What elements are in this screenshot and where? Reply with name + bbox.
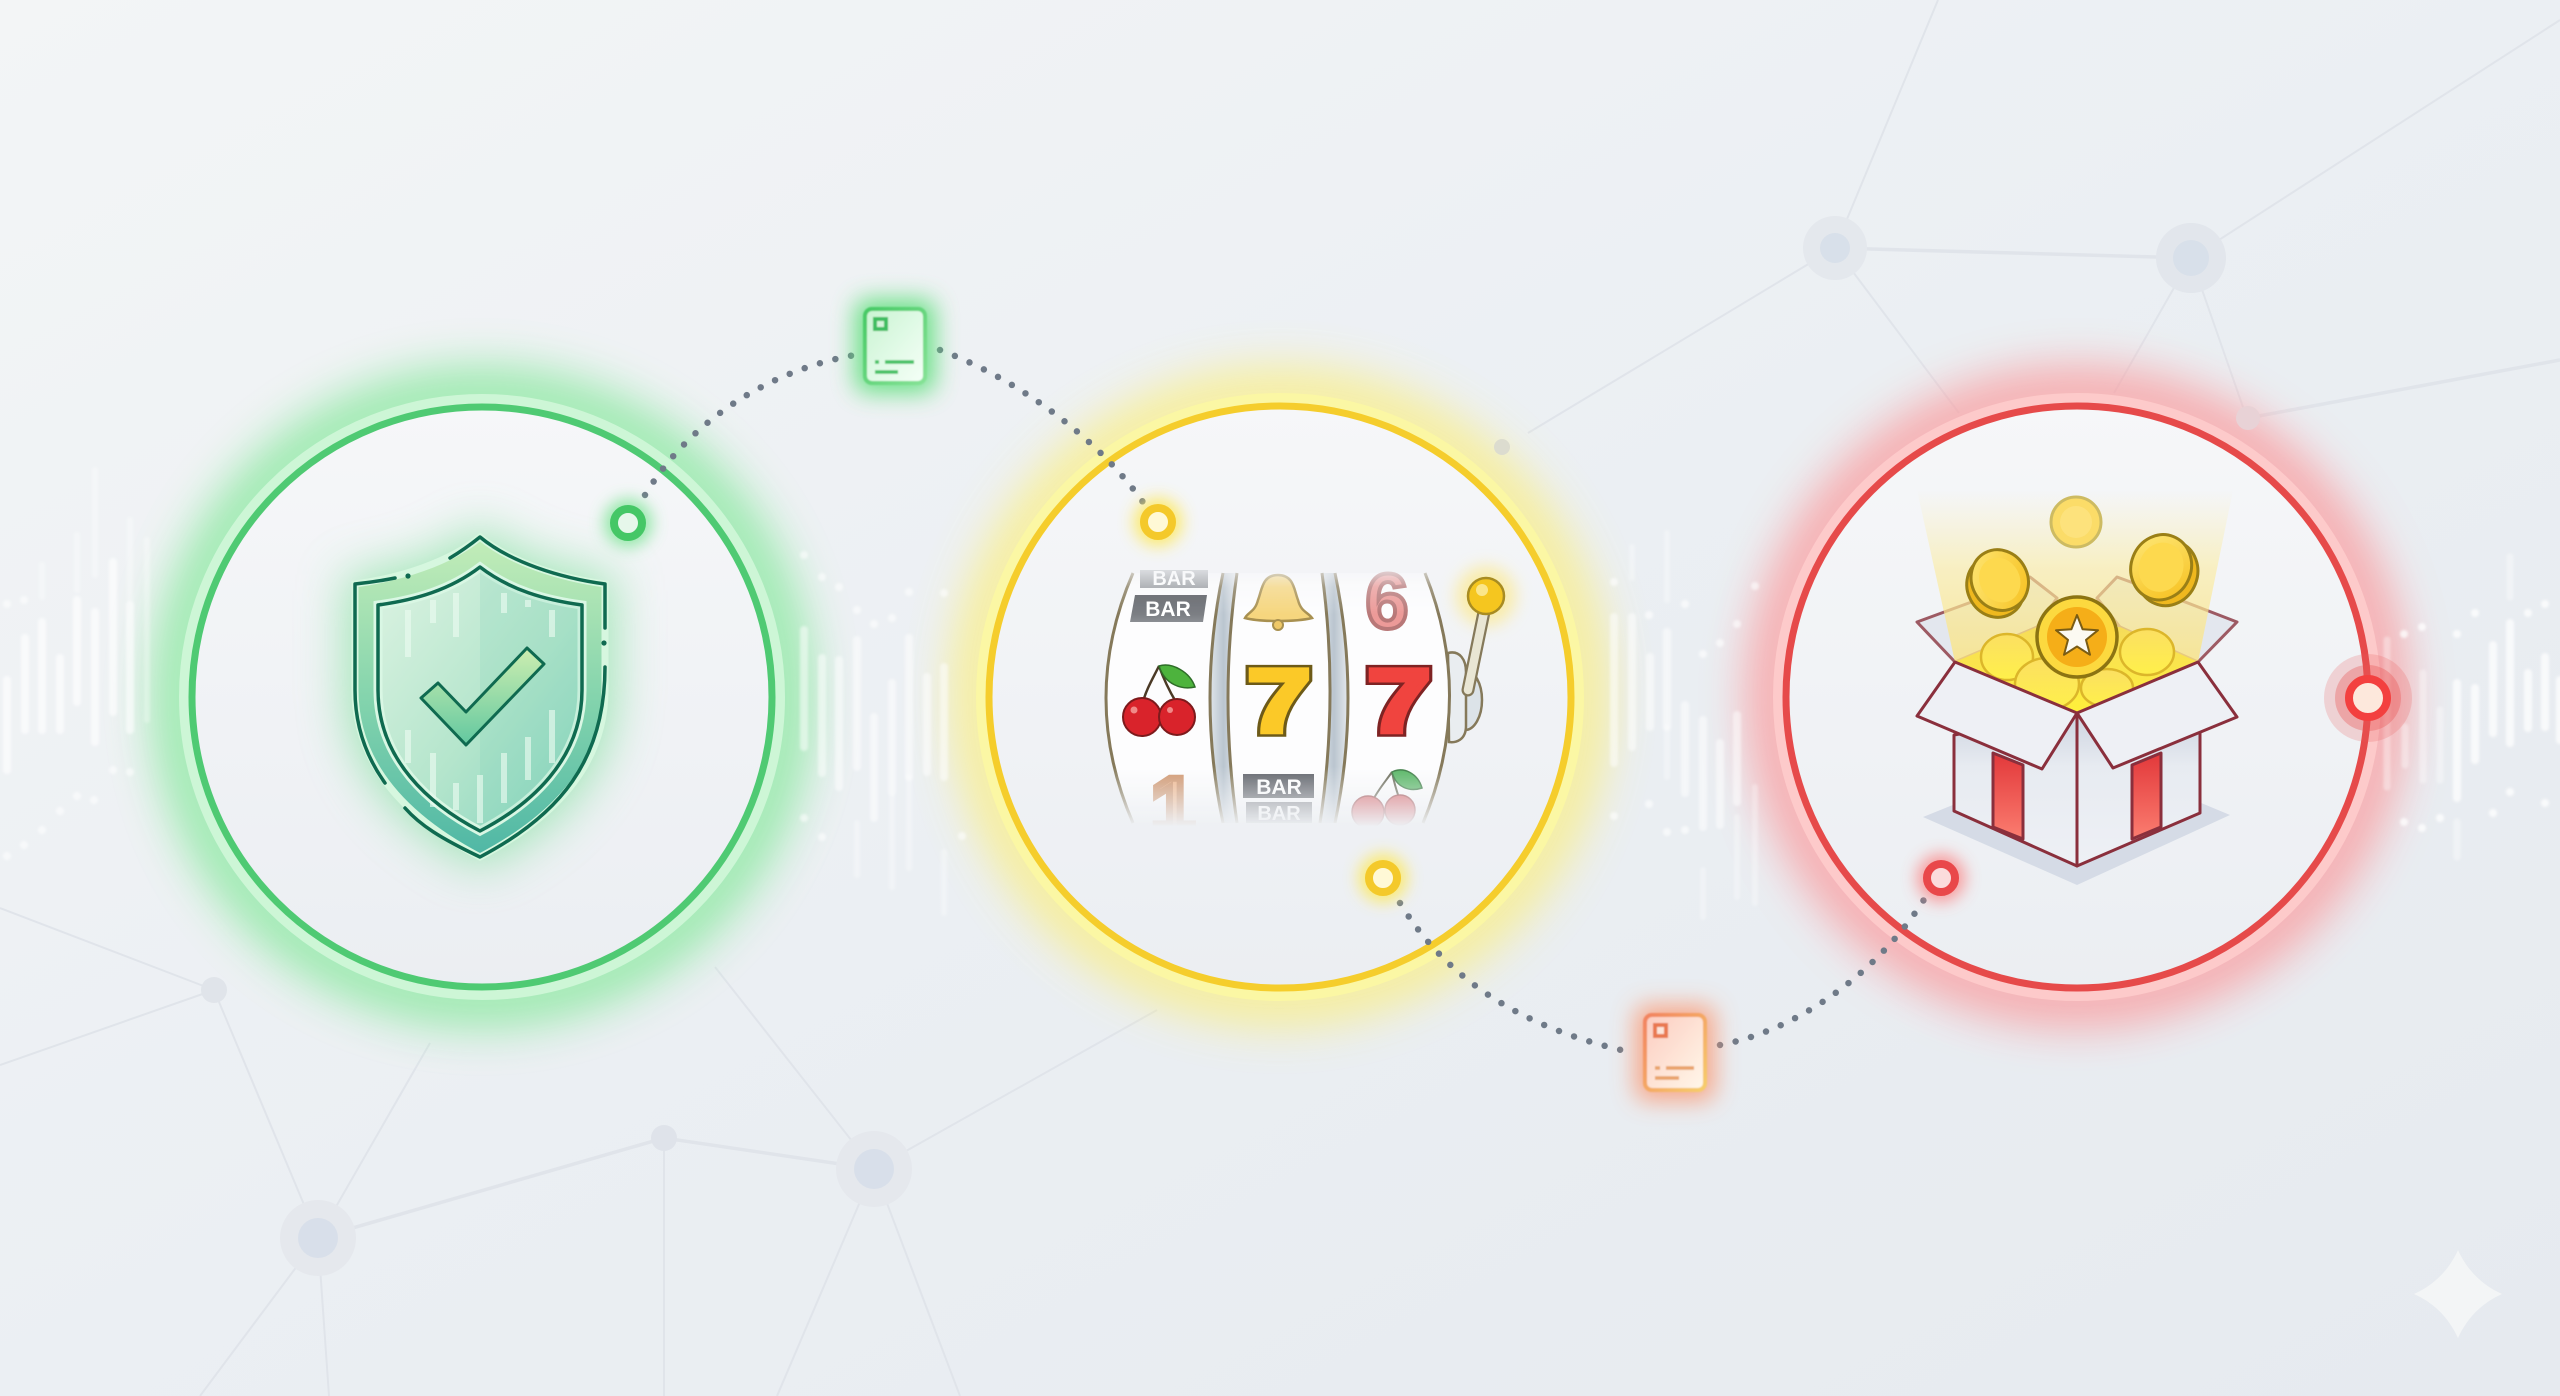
- reel 2 symbols: [1243, 575, 1314, 825]
- node over yellow glow: [1494, 439, 1510, 455]
- data bars: between green and yellow: [804, 555, 962, 913]
- marker: yellow ring top: [1134, 498, 1182, 546]
- symbol: yellow seven: [1246, 664, 1312, 737]
- red glow: [1774, 394, 2380, 1000]
- reel 1 symbols: 1: [1151, 761, 1195, 849]
- box body: [1954, 713, 2200, 866]
- ribbon: left: [1993, 753, 2023, 839]
- coin: left: [1954, 540, 2041, 627]
- connector: card to red: [1720, 898, 1925, 1045]
- symbol: red seven: 7: [1367, 652, 1431, 752]
- coin: right: [2120, 525, 2209, 615]
- network: top right: [1528, 0, 2560, 433]
- icon: green document card: [855, 299, 935, 393]
- connector: green to card: [645, 355, 855, 495]
- connector: card to yellow: [940, 350, 1145, 505]
- data bars: between yellow and red: [1614, 533, 1755, 917]
- icon: orange document card: [1635, 1005, 1715, 1101]
- node over red glow: [2236, 406, 2260, 430]
- reel 3 symbols: 6: [1365, 557, 1409, 645]
- connector: yellow to card: [1400, 903, 1630, 1052]
- box floor shadow: [1923, 790, 2230, 885]
- symbol: red seven: [1366, 664, 1432, 737]
- coin pile inside box: [1955, 627, 2198, 713]
- icon: slot machine reels: [1104, 570, 1451, 824]
- green glow: [179, 394, 785, 1000]
- symbol: yellow seven: 7: [1247, 652, 1311, 752]
- data bars: left: [7, 470, 147, 856]
- data bars: right: [2387, 557, 2560, 857]
- reel 3 symbols: [1352, 557, 1431, 828]
- reel 2 symbols: BAR: [1256, 776, 1302, 799]
- marker: yellow ring bottom: [1359, 854, 1407, 902]
- reel 2 symbols: BAR: [1257, 803, 1301, 825]
- back flaps: [1917, 577, 2237, 662]
- symbol: yellow seven: 7: [1247, 652, 1311, 752]
- icon: shield with check: [355, 537, 607, 857]
- coin: faded top: [2051, 497, 2101, 547]
- panel: green circle: [185, 400, 779, 994]
- network: bottom left: [0, 908, 1157, 1396]
- coin: centre star: [2037, 597, 2117, 677]
- panel: yellow circle: [982, 399, 1578, 995]
- reel 1 symbols: BAR: [1152, 568, 1196, 590]
- marker: green ring: [604, 499, 652, 547]
- icon: slot machine lever: [1448, 566, 1516, 742]
- reel 1 symbols: [1123, 568, 1208, 849]
- icon: sparkle watermark: [2414, 1250, 2502, 1338]
- ribbon: right: [2132, 753, 2161, 839]
- marker: red ring: [1917, 854, 1965, 902]
- icon: open gift box with coins: [1917, 490, 2237, 885]
- light beam: [1917, 490, 2233, 713]
- reel 1 symbols: BAR: [1145, 598, 1191, 621]
- icon: checkmark: [421, 648, 544, 745]
- front flaps: [1917, 662, 2237, 769]
- yellow glow: [977, 394, 1583, 1000]
- marker: red pulse node: [2324, 654, 2412, 742]
- panel: red circle: [1779, 399, 2412, 995]
- symbol: red seven: 7: [1367, 652, 1431, 752]
